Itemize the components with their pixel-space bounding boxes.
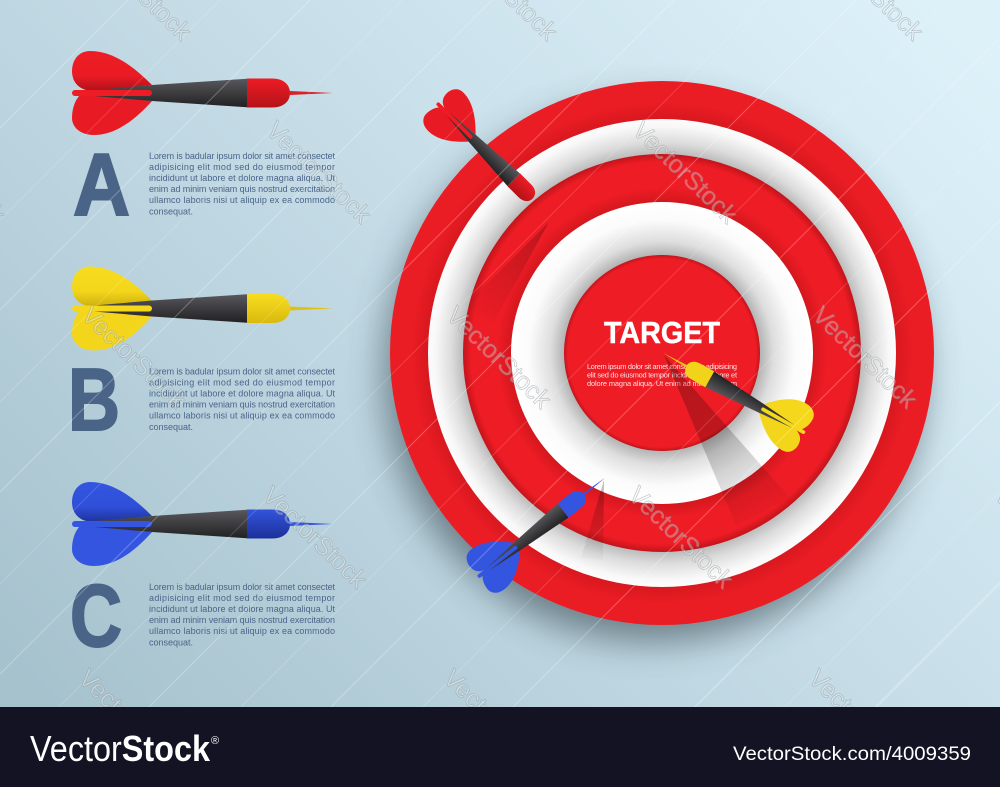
text block C: adipisicing elit mod sed do eiusmod tempor xyxy=(149,593,335,603)
dart: blue on board xyxy=(462,457,621,597)
text block B: incididunt ut labore et dolore magna aliqua. Ut xyxy=(149,388,335,398)
watermarks: VectorStock xyxy=(76,301,192,414)
text block B: Lorem is badular ipsum dolor sit amet consectet xyxy=(149,366,335,376)
outer red ring xyxy=(390,81,934,625)
text block A: adipisicing elit mod sed do eiusmod tempor xyxy=(149,162,335,172)
board shadow xyxy=(384,102,924,642)
dart shadow: yellow xyxy=(664,355,790,525)
target description: dolore magna aliqua. Ut enim ad minim veniam xyxy=(587,379,737,388)
legend dart A: red xyxy=(72,51,333,135)
text block B: ullamco laboris nisi ut aliquip ex ea commodo xyxy=(149,410,335,420)
text block C: incididunt ut labore et dolore magna aliqua. Ut xyxy=(149,604,335,614)
outer white ring xyxy=(428,119,896,587)
text block B: adipisicing elit mod sed do eiusmod tempor xyxy=(149,378,335,388)
watermarks: VectorStock xyxy=(73,664,189,777)
text block A: Lorem is badular ipsum dolor sit amet consectet xyxy=(149,151,335,161)
watermarks: VectorStock xyxy=(803,664,919,777)
watermarks: VectorStock xyxy=(627,116,743,229)
inner white ring xyxy=(511,202,813,504)
footer bar xyxy=(0,707,1000,787)
watermarks: VectorStock xyxy=(623,481,739,594)
dart: red on board xyxy=(419,85,551,217)
middle red ring xyxy=(463,154,861,552)
letter B: B xyxy=(68,350,120,449)
text block A: consequat. xyxy=(149,206,193,216)
registered mark: ® xyxy=(211,735,219,747)
legend dart C: blue xyxy=(72,482,333,566)
text block C: ullamco laboris nisi ut aliquip ex ea commodo xyxy=(149,626,335,636)
text block B: enim ad minim veniam quis nostrud exercitation xyxy=(149,400,335,410)
bullseye xyxy=(564,255,760,451)
text block C: consequat. xyxy=(149,638,193,648)
target title: TARGET xyxy=(604,315,720,350)
text block C: Lorem is badular ipsum dolor sit amet consectet xyxy=(149,582,335,592)
footer image id: VectorStock.com/4009359 xyxy=(733,743,971,765)
target board xyxy=(384,81,934,642)
dart: yellow on board xyxy=(650,330,818,456)
text block A: ullamco laboris nisi ut aliquip ex ea commodo xyxy=(149,195,335,205)
dart shadow: red xyxy=(466,222,549,325)
legend dart B: yellow xyxy=(72,266,333,350)
watermarks: VectorStock xyxy=(257,481,373,594)
text block C: enim ad minim veniam quis nostrud exercitation xyxy=(149,615,335,625)
letter C: C xyxy=(70,566,122,665)
dart shadow: blue xyxy=(581,480,604,560)
footer logo: VectorStock xyxy=(30,728,211,769)
watermarks: VectorStock xyxy=(261,116,377,229)
target description: elit sed do eiusmod tempor incididunt ut labore et xyxy=(587,370,737,380)
watermarks: VectorStock xyxy=(438,664,554,777)
text block A: incididunt ut labore et dolore magna aliqua. Ut xyxy=(149,173,335,183)
watermarks: VectorStock xyxy=(807,301,923,414)
watermarks: VectorStock xyxy=(441,301,557,414)
text block A: enim ad minim veniam quis nostrud exercitation xyxy=(149,184,335,194)
text block B: consequat. xyxy=(149,422,193,432)
letter A: A xyxy=(73,135,130,234)
target description: Lorem ipsum dolor sit amet consectetur adipisicing xyxy=(587,362,737,371)
